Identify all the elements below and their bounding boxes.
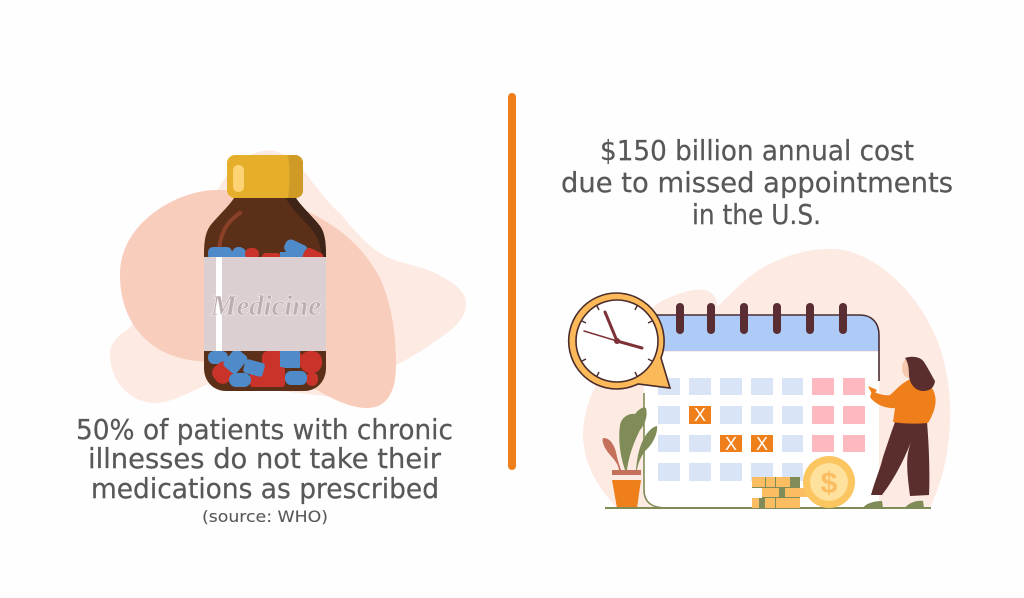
background blob (583, 249, 950, 508)
trousers (871, 422, 929, 496)
missed dates (689, 405, 773, 454)
coin stack shadows (752, 477, 800, 508)
icon: coins (752, 456, 855, 508)
text: cost statistic (561, 134, 953, 231)
dollar sign: $ (821, 467, 838, 500)
divider bar (508, 93, 516, 470)
red leaf (603, 438, 621, 470)
bottle cap (227, 155, 303, 198)
coin stacks (752, 477, 812, 508)
panel: missed appointments (561, 134, 953, 509)
calendar left edge (644, 393, 666, 508)
coin inner (810, 463, 848, 501)
ground line (605, 507, 931, 509)
text: adherence statistic (76, 413, 453, 526)
calendar page (644, 352, 879, 508)
panel: medication adherence (76, 150, 466, 526)
pills above label (208, 238, 325, 272)
head (902, 358, 916, 378)
bottle body (204, 195, 326, 391)
missed dates: X (694, 405, 706, 425)
bottle highlight (219, 213, 240, 254)
missed dates: X (725, 434, 737, 454)
calendar header (655, 315, 879, 351)
calendar outline (655, 315, 879, 381)
text: cost statistic: due to missed appointments (561, 166, 953, 199)
shoes (863, 501, 883, 508)
dollar coin (803, 456, 855, 508)
icon: medicine bottle (204, 155, 326, 391)
pot (612, 480, 641, 508)
clock face (576, 300, 658, 382)
pills below label (208, 347, 322, 387)
bottle label (204, 257, 326, 351)
clock hands (584, 312, 642, 348)
text: adherence statistic: illnesses do not take their (88, 442, 441, 475)
icon: potted plant (603, 407, 657, 508)
plant leaves (619, 407, 647, 470)
woman figure (863, 357, 936, 508)
label white stripe (216, 257, 222, 351)
cap shadow (288, 155, 303, 198)
light background blob (110, 150, 466, 403)
dark background blob (120, 190, 396, 408)
clock bubble (569, 293, 670, 389)
sweater (870, 378, 936, 424)
pot rim (612, 470, 641, 475)
text: cost statistic: in the U.S. (692, 198, 821, 231)
text: cost statistic: $150 billion annual cost (600, 134, 914, 167)
calendar (644, 303, 879, 508)
cap highlight (233, 165, 244, 192)
clock ticks (582, 306, 652, 376)
missed dates: X (756, 434, 768, 454)
hair (905, 357, 935, 391)
text: adherence statistic: (source: WHO) (202, 507, 328, 526)
text: adherence statistic: medications as prescribed (91, 472, 439, 505)
weekend dates (812, 378, 865, 452)
icon: clock (569, 293, 670, 389)
date grid (658, 378, 803, 481)
calendar rings (676, 303, 847, 334)
bottle shadow side (285, 197, 326, 258)
text: adherence statistic: 50% of patients with chronic (76, 413, 453, 446)
hand (868, 386, 877, 396)
label text: Medicine (210, 291, 321, 322)
